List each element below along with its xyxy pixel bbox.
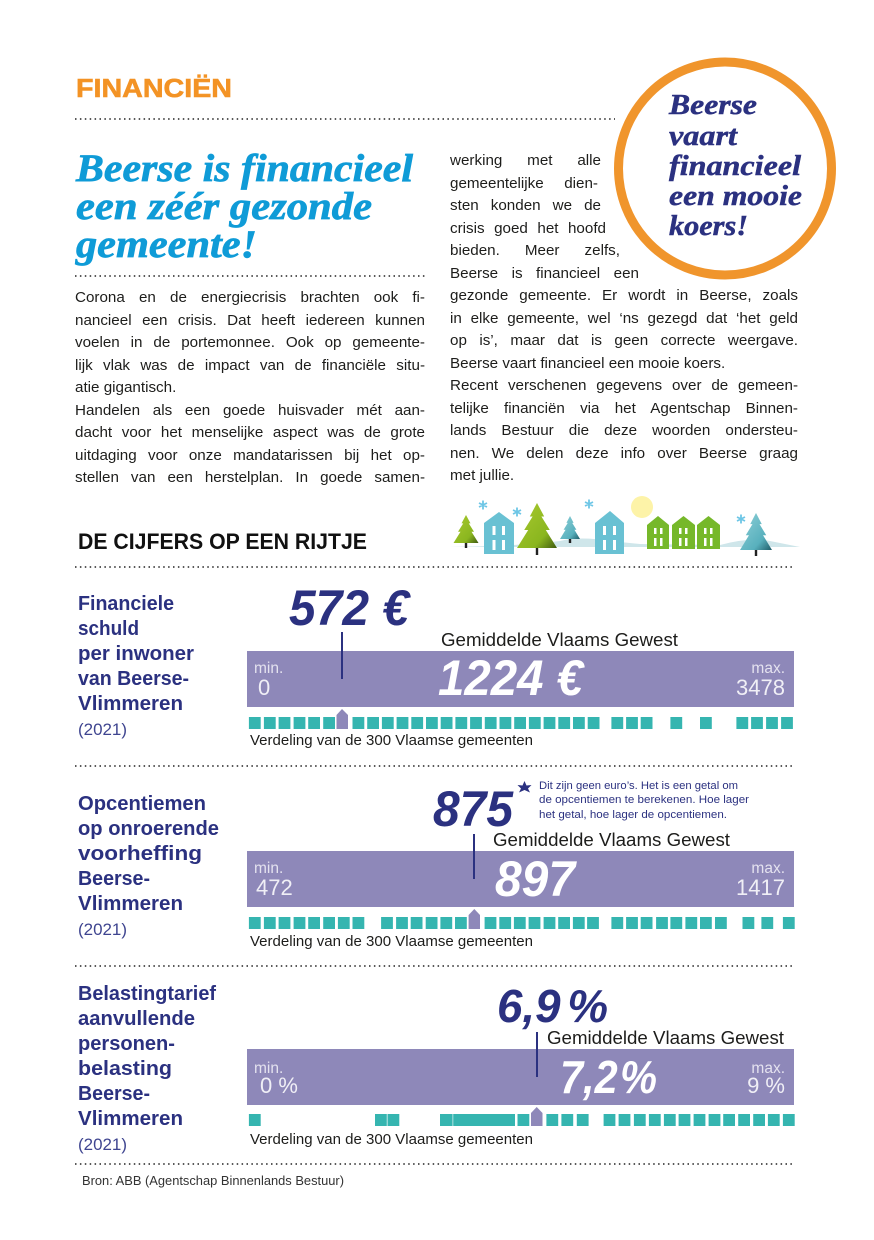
Beerse value: 875	[433, 781, 514, 837]
body text: right column	[450, 152, 798, 484]
range bar: 0	[258, 675, 270, 700]
range bar: 7,2 %	[560, 1051, 657, 1103]
callout: orange circle quote: vaart	[669, 121, 738, 152]
panel: opcentiemen	[78, 780, 795, 950]
row title: personen-	[78, 1033, 175, 1055]
section label: Financiën: FINANCIËN	[76, 73, 232, 103]
row title: Beerse-	[78, 868, 150, 890]
row title: (2021)	[78, 1135, 127, 1154]
range bar: 9 %	[747, 1073, 785, 1098]
range bar: 1417	[736, 875, 785, 900]
text: met jullie.	[450, 467, 514, 484]
range bar	[247, 851, 794, 907]
footnote: de opcentiemen te berekenen. Hoe lager	[539, 794, 749, 806]
text: gezonde gemeente. Er wordt in Beerse, zoals	[450, 287, 798, 304]
average label: Gemiddelde Vlaams Gewest	[441, 629, 678, 650]
Beerse value: 572 €	[289, 580, 411, 636]
callout: orange circle quote: financieel	[669, 151, 801, 182]
main heading: een zéér gezonde	[76, 185, 372, 228]
text: gemeentelijke dien-	[450, 174, 598, 192]
callout: orange circle quote: een mooie	[669, 181, 802, 212]
text: lands Bestuur die deze woorden ondersteu-	[450, 422, 798, 439]
callout: orange circle quote: koers!	[669, 211, 748, 242]
range bar: 0 %	[260, 1073, 298, 1098]
range bar: min.	[254, 660, 283, 677]
main heading	[75, 147, 413, 266]
body text: left column	[75, 289, 425, 486]
row title: belasting	[78, 1058, 172, 1080]
row title	[78, 983, 216, 1154]
range bar: max.	[751, 1060, 785, 1077]
row title: Opcentiemen	[78, 793, 206, 815]
icon: asterisk	[518, 781, 532, 792]
row title: per inwoner	[78, 643, 194, 665]
range bar	[247, 1049, 794, 1105]
range bar: 897	[495, 851, 577, 907]
range bar: min.	[254, 860, 283, 877]
row title: Financiele	[78, 593, 174, 615]
pointer line	[341, 632, 343, 679]
row title: Belastingtarief	[78, 983, 216, 1005]
text: Corona en de energiecrisis brachten ook fi-	[75, 289, 425, 306]
text: uitdaging voor onze mandatarissen bij het op-	[75, 446, 425, 464]
row title: (2021)	[78, 920, 127, 939]
panel: financiële schuld	[78, 580, 794, 749]
text: nancieel een crisis. Dat heeft iedereen kunnen	[75, 312, 425, 328]
row title: aanvullende	[78, 1008, 195, 1030]
main heading: gemeente!	[75, 223, 257, 266]
text: voelen in de portemonnee. Ook op gemeente-	[75, 334, 425, 351]
distribution caption: Verdeling van de 300 Vlaamse gemeenten	[250, 933, 533, 950]
text: crisis goed het hoofd	[450, 220, 606, 236]
text: Recent verschenen gegevens over de gemeen-	[450, 377, 798, 394]
distribution caption: Verdeling van de 300 Vlaamse gemeenten	[250, 732, 533, 749]
range bar: 1224 €	[438, 650, 585, 706]
footnote	[539, 780, 749, 821]
row title: Beerse-	[78, 1083, 150, 1105]
heading: De cijfers op een rijtje: DE CIJFERS OP EEN RIJTJE	[78, 529, 367, 554]
range bar: max.	[751, 860, 785, 877]
footnote: Dit zijn geen euro’s. Het is een getal om	[539, 780, 738, 792]
illustration: winter village	[450, 496, 800, 556]
range bar: max.	[751, 660, 785, 677]
range bar: 472	[256, 875, 293, 900]
row title: Vlimmeren	[78, 693, 183, 715]
distribution caption: Verdeling van de 300 Vlaamse gemeenten	[250, 1131, 533, 1148]
distribution squares	[249, 709, 793, 729]
range bar: min.	[254, 1060, 283, 1077]
panel: belastingtarief	[78, 980, 795, 1154]
callout: orange circle quote	[618, 62, 832, 275]
row title: Vlimmeren	[78, 893, 183, 915]
row title: voorheffing	[78, 843, 202, 865]
row title: schuld	[78, 618, 139, 640]
range bar	[247, 650, 794, 707]
row title: (2021)	[78, 720, 127, 739]
pointer line	[473, 834, 475, 879]
row title	[78, 793, 219, 939]
source note: Bron: ABB (Agentschap Binnenlands Bestuur)	[82, 1173, 344, 1188]
text: Beerse is financieel een	[450, 264, 639, 282]
text: dacht voor het menselijke aspect was de grote	[75, 424, 425, 441]
text: stellen van een herstelplan. In goede samen-	[75, 469, 425, 486]
text: telijke financiën via het Agentschap Binnen-	[450, 400, 798, 416]
average label: Gemiddelde Vlaams Gewest	[547, 1027, 784, 1048]
row title	[78, 593, 194, 739]
Beerse value: 6,9 %	[497, 980, 608, 1032]
row title: op onroerende	[78, 818, 219, 840]
text: Handelen als een goede huisvader mét aan-	[75, 402, 425, 418]
average label: Gemiddelde Vlaams Gewest	[493, 829, 730, 850]
text: sten konden we de	[450, 197, 601, 214]
footnote: het getal, hoe lager de opcentiemen.	[539, 809, 727, 821]
text: bieden. Meer zelfs,	[450, 242, 620, 259]
text: nen. We delen deze info over Beerse graag	[450, 444, 798, 462]
distribution squares	[249, 909, 795, 929]
text: atie gigantisch.	[75, 379, 176, 396]
row title: Vlimmeren	[78, 1108, 183, 1130]
text: Beerse vaart financieel een mooie koers.	[450, 354, 725, 372]
main heading: Beerse is financieel	[75, 147, 413, 190]
callout: orange circle quote: Beerse	[668, 90, 757, 121]
row title: van Beerse-	[78, 668, 189, 690]
distribution squares	[249, 1107, 795, 1126]
pointer line	[536, 1032, 538, 1077]
text: lijk vlak was de impact van de financiële situ-	[75, 356, 425, 374]
text: werking met alle	[450, 152, 601, 169]
text: in elke gemeente, wel ‘ns gezegd dat ‘het geld	[450, 310, 798, 326]
text: op is’, maar dat is geen correcte weergave.	[450, 332, 798, 349]
range bar: 3478	[736, 675, 785, 700]
